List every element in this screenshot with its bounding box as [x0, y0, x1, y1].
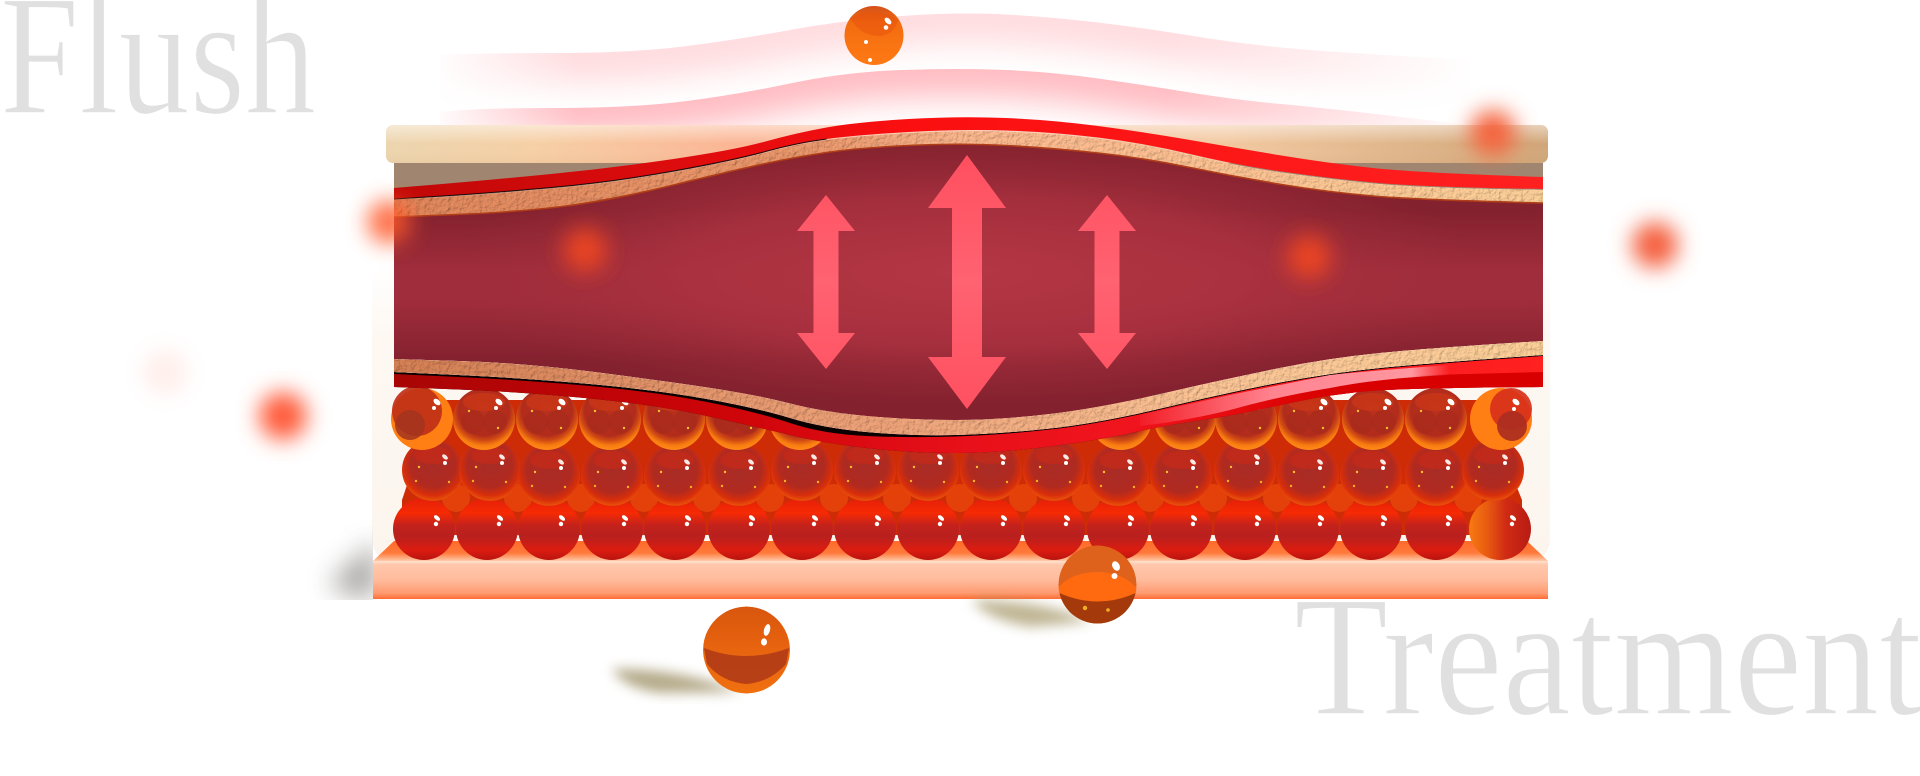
blurred droplets — [143, 110, 1678, 440]
sphere back row — [442, 484, 1482, 512]
vessel lumen — [394, 144, 1543, 420]
lower vessel wall — [394, 341, 1543, 453]
backing panel — [372, 262, 1550, 562]
lower wall: copper inner layer — [394, 341, 1543, 435]
sphere backing — [402, 400, 1522, 535]
lower wall: glossy highlight — [1140, 365, 1450, 426]
sphere row: middle — [402, 439, 1524, 506]
ball shadow: lower right — [972, 600, 1090, 627]
ball: lower right — [1058, 546, 1136, 624]
sphere row: top — [391, 386, 1532, 450]
spheres: layered fat cells — [391, 386, 1532, 560]
ball: top — [844, 6, 904, 65]
lower wall: black gap — [394, 355, 1543, 453]
base slab — [373, 541, 1548, 599]
upper wall: copper inner layer — [394, 131, 1543, 217]
arrow: centre expansion — [928, 155, 1006, 409]
lower wall: dark underside — [1120, 372, 1543, 432]
dermis band under the skin — [394, 163, 1543, 207]
lower wall: red outer layer — [394, 356, 1543, 453]
upper vessel wall — [394, 117, 1543, 217]
arrow: right expansion — [1078, 195, 1136, 369]
skin layer — [386, 125, 1548, 163]
flow wisps above the skin — [450, 14, 1438, 125]
ball shadow: lower left — [612, 669, 740, 693]
arrow: left expansion — [797, 195, 855, 369]
sphere row: bottom — [393, 498, 1531, 560]
slab shadow — [330, 540, 376, 598]
upper wall: red outer layer — [394, 117, 1543, 199]
ball: lower left — [703, 606, 790, 694]
